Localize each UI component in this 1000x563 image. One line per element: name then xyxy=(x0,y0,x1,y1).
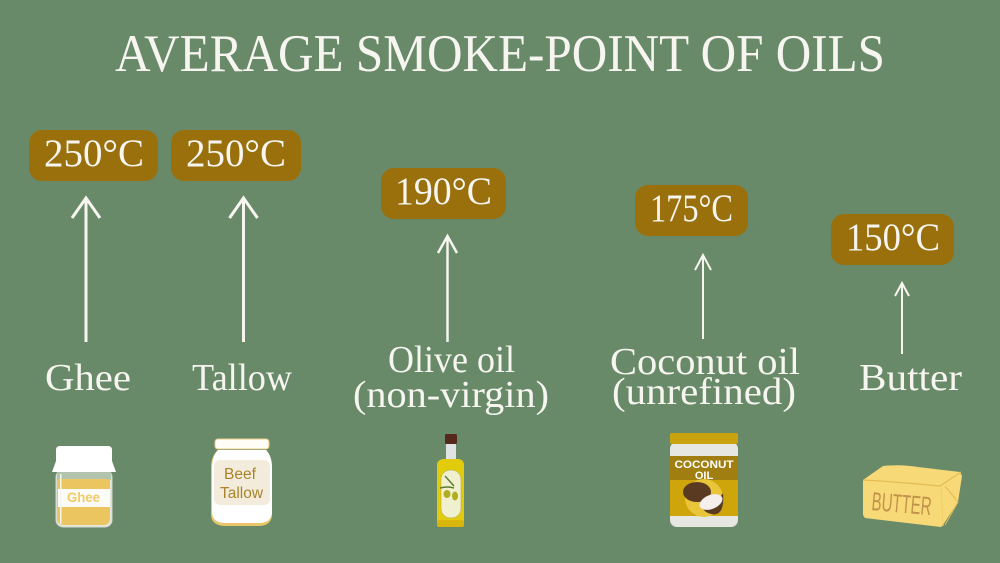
label: olive oil (non-virgin): Olive oil xyxy=(388,339,515,381)
title: AVERAGE SMOKE-POINT OF OILS xyxy=(115,25,885,83)
arrow: olive oil xyxy=(438,236,457,342)
temperature badge: olive oil 190°C: 190°C xyxy=(395,170,492,213)
label: tallow: Tallow xyxy=(192,357,293,399)
temperature badge: olive oil 190°C xyxy=(381,168,506,219)
arrow: ghee xyxy=(72,198,100,342)
icon: butter block xyxy=(863,465,962,527)
icon: coconut oil jar xyxy=(670,433,738,527)
arrow: tallow xyxy=(230,198,258,342)
label: butter: Butter xyxy=(859,357,962,399)
arrow: coconut oil xyxy=(695,255,711,339)
icon: beef tallow jar: Tallow xyxy=(220,485,264,502)
temperature badge: coconut oil 175°C: 175°C xyxy=(650,187,733,230)
temperature badge: ghee 250°C: 250°C xyxy=(44,132,144,175)
icon: beef tallow jar: Beef xyxy=(224,466,257,483)
icon: butter block: BUTTER xyxy=(870,486,933,521)
temperature badge: butter 150°C: 150°C xyxy=(846,216,940,259)
icon: beef tallow jar xyxy=(211,439,272,526)
icon: olive oil bottle xyxy=(437,434,464,527)
temperature badge: tallow 250°C: 250°C xyxy=(186,132,286,175)
icon: ghee jar xyxy=(52,446,116,527)
icon: coconut oil jar: COCONUT xyxy=(674,459,734,471)
label: ghee: Ghee xyxy=(45,357,131,399)
arrow: butter xyxy=(895,283,909,354)
icon: coconut oil jar: OIL xyxy=(695,470,713,482)
temperature badge: butter 150°C xyxy=(831,214,954,265)
temperature badge: tallow 250°C xyxy=(171,130,301,181)
icon: ghee jar: Ghee xyxy=(67,490,100,505)
label: coconut oil (unrefined): Coconut oil xyxy=(610,341,800,383)
label: coconut oil (unrefined) xyxy=(610,341,800,413)
label: olive oil (non-virgin) xyxy=(353,339,549,416)
label: olive oil (non-virgin): (non-virgin) xyxy=(353,374,549,416)
label: coconut oil (unrefined): (unrefined) xyxy=(612,371,796,413)
temperature badge: ghee 250°C xyxy=(29,130,158,181)
